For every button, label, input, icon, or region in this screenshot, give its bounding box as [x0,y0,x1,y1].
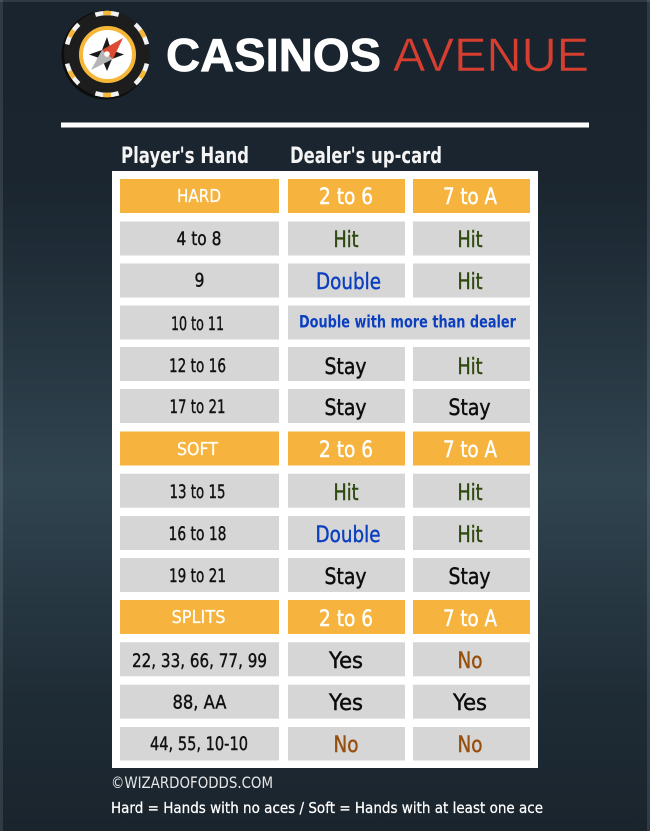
section: soft header: 7 to A [443,437,497,463]
strategy table [112,171,538,768]
row: 13 to 15: Hit [458,481,483,506]
row: 4 to 8: 4 to 8 [176,229,222,250]
row: 44, 55, 10-10: 44, 55, 10-10 [150,734,248,755]
section: hard header: HARD [177,187,221,207]
section: hard header [120,179,530,213]
row: 16 to 18: 16 to 18 [168,524,226,545]
row: 22, 33, 66, 77, 99: Yes [328,649,363,674]
row: 44, 55, 10-10: No [458,733,482,758]
row: 12 to 16: 12 to 16 [169,356,226,377]
row: 9: Double [316,270,381,295]
row: 44, 55, 10-10 [120,727,530,760]
section: splits header: 7 to A [443,606,497,632]
row: 17 to 21 [120,389,530,423]
logo wordmark [166,28,589,81]
section: splits header: 2 to 6 [319,606,373,632]
column heading: player's hand: Player's Hand [121,144,249,169]
row: 88, AA: 88, AA [172,692,227,714]
row: 22, 33, 66, 77, 99: No [458,649,482,674]
row: 88, AA: Yes [328,691,363,716]
row: 16 to 18: Double [316,523,380,548]
section: soft header: SOFT [177,440,218,460]
section: soft header [120,432,530,466]
row: 16 to 18 [120,516,530,550]
row: 22, 33, 66, 77, 99: 22, 33, 66, 77, 99 [132,651,267,672]
row: 4 to 8 [120,222,530,256]
row: 10 to 11: 10 to 11 [171,314,224,335]
row: 19 to 21: 19 to 21 [169,566,226,587]
row: 19 to 21: Stay [448,565,490,590]
row: 16 to 18: Hit [458,523,483,548]
logo: casino chip with compass [56,3,158,105]
header divider [61,122,589,128]
row: 9: Hit [458,270,483,295]
row: 19 to 21: Stay [324,565,366,590]
section: hard header: 7 to A [443,184,497,210]
row: 10 to 11 [120,306,530,340]
section: splits header [120,600,530,634]
row: 88, AA: Yes [452,691,487,716]
row: 13 to 15: Hit [334,481,359,506]
section: splits header: SPLITS [172,608,226,628]
row: 12 to 16 [120,347,530,381]
row: 17 to 21: Stay [324,396,366,421]
row: 13 to 15: 13 to 15 [170,482,226,503]
row: 17 to 21: 17 to 21 [170,397,226,418]
row: 12 to 16: Hit [458,355,483,380]
logo wordmark: CASINOS [166,29,381,81]
logo wordmark: AVENUE [393,28,589,81]
row: 12 to 16: Stay [324,355,366,380]
source credit: ©WIZARDOFODDS.COM [111,773,273,792]
row: 19 to 21 [120,558,530,592]
row: 9 [120,264,530,298]
row: 22, 33, 66, 77, 99 [120,642,530,676]
footnote: Hard = Hands with no aces / Soft = Hands with at least one ace [111,799,543,817]
column heading: dealer's up-card: Dealer's up-card [290,144,442,169]
section: hard header: 2 to 6 [319,184,373,210]
row: 88, AA [120,685,530,719]
row: 17 to 21: Stay [448,396,490,421]
row: 13 to 15 [120,474,530,508]
table panel [112,171,538,768]
row: 44, 55, 10-10: No [334,733,358,758]
row: 10 to 11: Double with more than dealer [299,312,516,332]
row: 4 to 8: Hit [458,228,483,253]
section: soft header: 2 to 6 [319,437,373,463]
row: 9: 9 [194,270,204,292]
row: 4 to 8: Hit [334,228,359,253]
